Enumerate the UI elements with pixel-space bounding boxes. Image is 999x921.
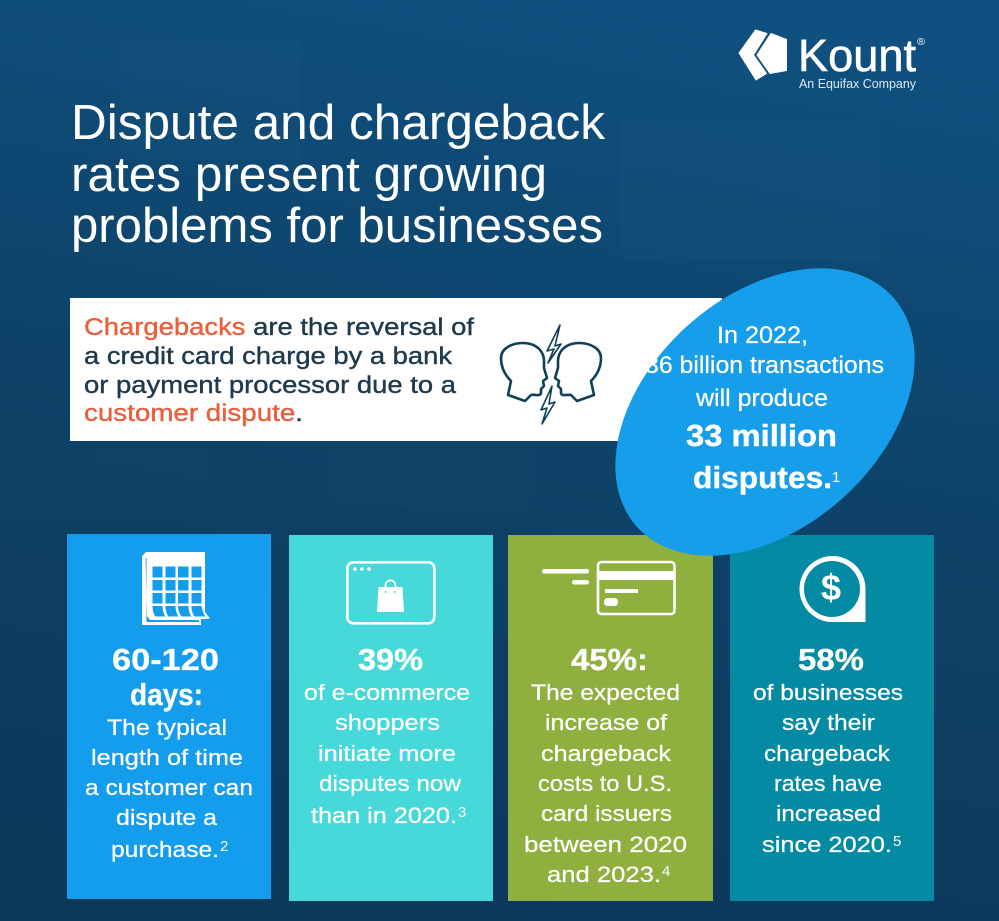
card text: card issuers [541,801,672,826]
icon: dollar badge: $ [821,567,841,608]
icon: browser with shopping bag [347,562,434,623]
card text: 39% [358,642,423,677]
card text [753,642,903,857]
card text: say their [782,710,876,735]
card text: chargeback [541,741,672,766]
card text [85,642,253,862]
logo: Kount [739,30,926,91]
card text: The expected [531,680,680,705]
card text: increased [776,801,881,826]
definition text: a credit card charge by a bank [84,343,453,370]
panel: 60-120 days [67,534,271,899]
callout: 33 million disputes: disputes. [693,460,832,495]
icon: two heads with lightning [501,325,601,424]
callout: 33 million disputes: 33 million [686,418,837,453]
card text: costs to U.S. [538,771,672,796]
definition text: Chargebacks are the reversal of [84,314,474,341]
definition text [84,314,474,427]
card text: of businesses [753,680,903,705]
card text: between 2020 [524,832,687,857]
card text: initiate more [318,741,456,766]
card text: 4 [662,863,670,880]
card text: rates have [774,771,882,796]
logo: Kount: Kount [798,30,916,81]
card text: length of time [91,745,243,770]
card text: disputes now [319,771,462,796]
definition text: or payment processor due to a [84,372,456,399]
card text: of e-commerce [304,680,470,705]
card text: and 2023. [547,862,661,887]
card text: 58% [798,642,864,677]
title: rates present growing [71,148,547,202]
card text: 3 [458,804,466,821]
card text: 5 [893,833,901,850]
card text: purchase. [111,837,219,862]
card text: chargeback [764,741,891,766]
callout: 33 million disputes [560,211,970,613]
title: Dispute and chargeback [71,96,606,150]
card text: 60-120 [112,642,219,677]
card text: days: [130,677,203,712]
panel: 58% [730,535,934,901]
panel: 39% [289,535,493,901]
callout: 33 million disputes: 36 billion transactions [645,352,884,379]
definition text: customer dispute . [84,400,303,427]
icon: dollar badge [800,556,866,622]
icon: credit card with speed lines [542,562,674,614]
callout: 33 million disputes: In 2022, [717,322,808,349]
card text: dispute a [116,805,218,830]
card text: increase of [545,710,668,735]
card text [304,642,470,828]
callout: 33 million disputes: 1 [832,469,840,486]
logo: Kount: ® [917,37,926,48]
title: problems for businesses [71,199,603,253]
callout: 33 million disputes: will produce [695,385,828,412]
panel: 45% [508,535,713,901]
card text: than in 2020. [311,803,457,828]
panel: chargeback definition [70,298,722,441]
icon: calendar [142,552,210,625]
card text: 45%: [571,642,648,677]
card text: 2 [220,838,228,855]
card text [524,642,687,887]
card text: shoppers [335,710,440,735]
card text: a customer can [85,775,253,800]
card text: The typical [107,715,227,740]
logo: Kount: An Equifax Company [799,76,916,91]
card text: since 2020. [762,832,892,857]
title [71,96,606,253]
